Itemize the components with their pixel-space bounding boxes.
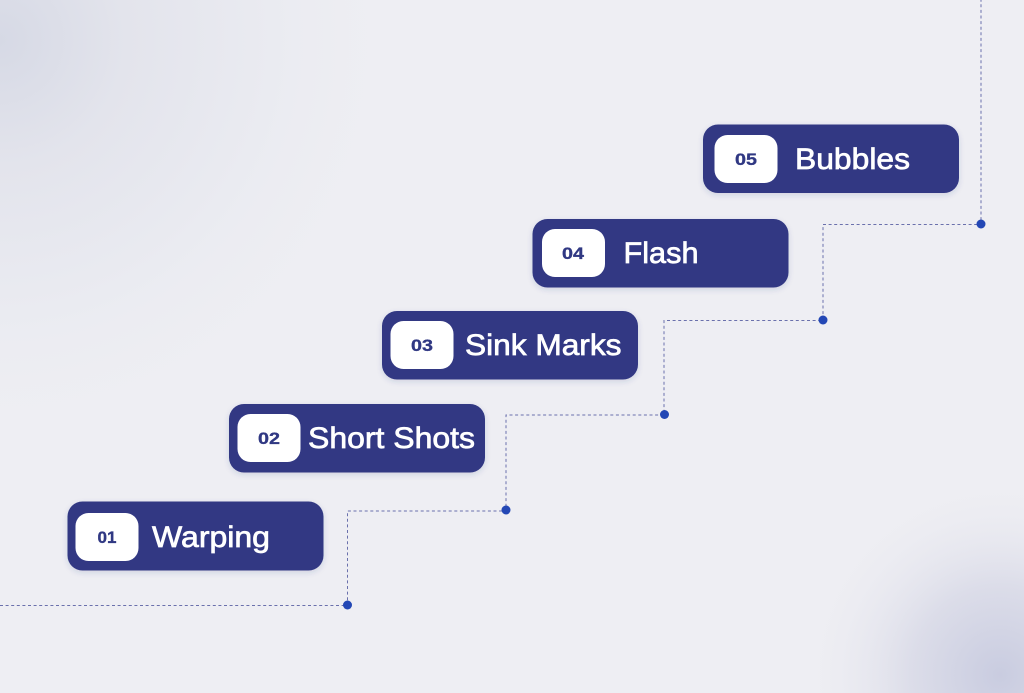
step 03: Sink Marks — [382, 311, 638, 380]
step 01: Warping: Warping — [152, 521, 270, 554]
step 02: Short Shots: 02 — [258, 429, 280, 448]
step 05: Bubbles: Bubbles — [795, 143, 910, 176]
step 03: Sink Marks: Sink Marks — [465, 329, 622, 362]
step 05: Bubbles — [703, 124, 959, 193]
step 02: Short Shots: Short Shots — [308, 422, 475, 455]
step 04: Flash: 04 — [562, 244, 585, 263]
step 01: Warping — [68, 502, 324, 570]
step 03: Sink Marks: 03 — [411, 336, 433, 355]
dot: step 4 — [818, 316, 828, 324]
dot: step 3 — [660, 410, 669, 419]
step 05: Bubbles: 05 — [735, 150, 757, 169]
step 04: Flash: Flash — [624, 237, 698, 270]
dot: step 5 — [976, 220, 986, 228]
step 04: Flash — [532, 219, 788, 288]
step 01: Warping: 01 — [98, 528, 116, 547]
step 02: Short Shots — [229, 404, 485, 472]
dot: step 2 — [502, 506, 510, 514]
dot: step 1 — [343, 600, 352, 610]
